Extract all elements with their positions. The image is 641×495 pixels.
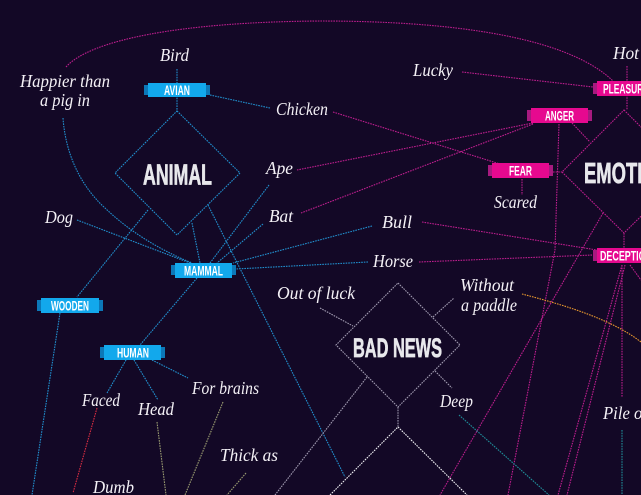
labels: idiom words: Horse — [372, 251, 413, 271]
badge: wooden — [37, 298, 103, 314]
labels: idiom words: Ape — [265, 158, 293, 178]
connector network: blue animal links — [32, 69, 372, 495]
labels: idiom words: Chicken — [276, 99, 328, 119]
lower white diamond — [330, 427, 467, 495]
badge: wooden: WOODEN — [51, 298, 89, 314]
badge: avian: AVIAN — [164, 82, 190, 98]
labels: idiom words: Dog — [44, 207, 73, 227]
badge: anger — [527, 108, 592, 124]
labels: idiom words: Bird — [160, 45, 190, 65]
badge: mammal: MAMMAL — [184, 262, 223, 278]
labels: idiom words: Head — [137, 399, 175, 419]
labels: idiom words: Happier than — [19, 71, 110, 91]
labels: idiom words: Scared — [494, 192, 538, 212]
labels: idiom words: Without — [460, 275, 515, 295]
labels: idiom words: a paddle — [461, 295, 517, 315]
labels: idiom words: Out of luck — [277, 283, 356, 303]
labels: idiom words: a pig in — [40, 90, 90, 110]
animal diamond — [115, 111, 240, 235]
badge: avian — [144, 82, 210, 98]
badge: fear — [488, 162, 553, 178]
labels: idiom words: For brains — [191, 378, 259, 398]
labels: idiom words: Hot — [612, 43, 640, 63]
labels: idiom words: Bull — [382, 212, 412, 232]
heading: animal: ANIMAL — [143, 160, 212, 192]
emotion diamond — [562, 110, 641, 233]
labels: idiom words: Lucky — [412, 60, 453, 80]
labels: idiom words: Deep — [439, 391, 473, 411]
labels: idiom words: Bat — [269, 206, 294, 226]
badge: mammal — [171, 262, 236, 278]
connector network: other category links — [73, 283, 641, 495]
badge: human — [100, 344, 165, 360]
labels: idiom words: Faced — [81, 390, 121, 410]
bad news diamond — [336, 283, 460, 407]
badge: fear: FEAR — [509, 162, 532, 178]
badge: anger: ANGER — [545, 108, 574, 124]
heading: bad news: BAD NEWS — [353, 333, 442, 363]
badge: human: HUMAN — [117, 344, 149, 360]
labels: idiom words: Thick as — [220, 445, 278, 465]
